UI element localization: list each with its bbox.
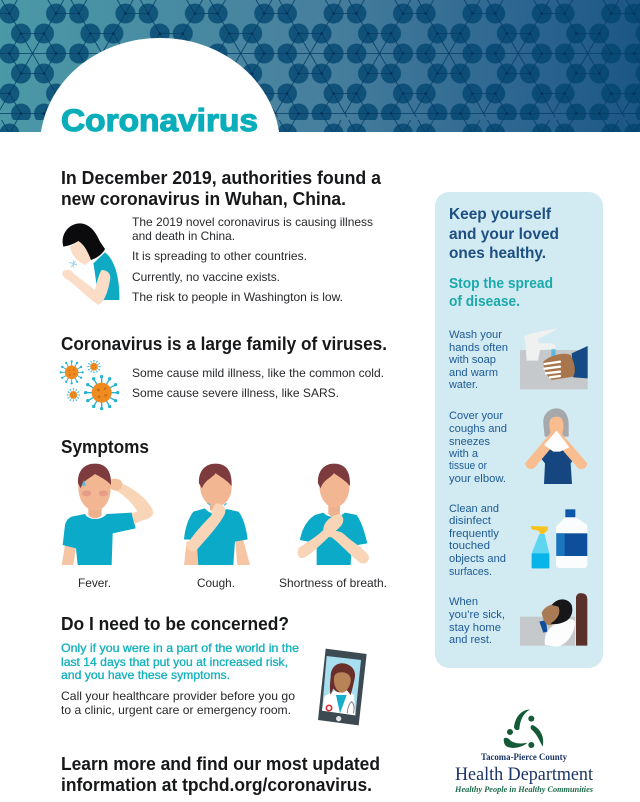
teal paragraph	[61, 641, 299, 682]
panel heading: ones healthy.	[449, 245, 546, 262]
tip: clean surfaces	[449, 503, 506, 578]
tip: stay home	[449, 596, 505, 646]
teal paragraph: and you have these symptoms.	[61, 668, 230, 682]
logo: Health Department	[454, 709, 594, 794]
text block: situation: The risk to people in Washington is low.	[132, 290, 343, 304]
panel subheading: Stop the spread	[449, 276, 553, 292]
text block: situation: It is spreading to other countries.	[132, 249, 307, 263]
icon: viruses	[60, 360, 119, 410]
panel subheading: of disease.	[449, 294, 520, 310]
tip: wash hands: and warm	[449, 367, 498, 379]
footer call to action	[61, 754, 380, 795]
tip: wash hands: hands often	[449, 342, 508, 354]
icon: washing hands	[520, 328, 588, 389]
call paragraph: Call your healthcare provider before you go	[61, 689, 295, 703]
header banner	[0, 0, 640, 132]
icon: cleaning bottles	[531, 509, 587, 568]
text block: situation: and death in China.	[132, 229, 235, 243]
white arch	[41, 38, 279, 132]
panel heading: Keep yourself	[449, 206, 552, 223]
tip: cover coughs	[448, 410, 507, 485]
logo: Health Department: Healthy People in Healthy Communities	[454, 784, 594, 794]
call paragraph: to a clinic, urgent care or emergency room.	[61, 703, 291, 717]
panel subheading	[449, 276, 553, 310]
panel: keep healthy	[435, 192, 603, 668]
tip: wash hands: with soap	[448, 354, 496, 366]
text block: situation: The 2019 novel coronavirus is causing illness	[132, 215, 373, 229]
symptom labels: Fever.	[78, 576, 111, 590]
tip: stay home: When	[449, 596, 478, 608]
panel heading	[449, 206, 559, 262]
teal paragraph: Only if you were in a part of the world in the	[61, 641, 299, 655]
tip: cover coughs: with a	[448, 448, 479, 460]
title: Coronavirus	[61, 102, 258, 138]
tip: wash hands	[448, 329, 508, 391]
tip: clean surfaces: touched	[449, 540, 490, 552]
tip: clean surfaces: Clean and	[449, 503, 499, 515]
text block: illness types: Some cause mild illness, like the common cold.	[132, 366, 384, 380]
heading: December 2019: new coronavirus in Wuhan, China.	[61, 189, 346, 209]
tip: clean surfaces: surfaces.	[449, 566, 492, 578]
text block: illness types: Some cause severe illness, like SARS.	[132, 386, 339, 400]
footer call to action: Learn more and find our most updated	[61, 754, 380, 774]
figure: cough	[184, 464, 250, 565]
footer call to action: information at tpchd.org/coronavirus.	[61, 775, 372, 795]
tip: stay home: you’re sick,	[449, 609, 505, 621]
panel heading: and your loved	[449, 226, 559, 243]
tip: cover coughs: your elbow.	[449, 473, 506, 485]
tip: clean surfaces: disinfect	[449, 515, 492, 527]
call paragraph	[61, 689, 295, 717]
symptom labels: Shortness of breath.	[279, 576, 387, 590]
tip: wash hands: Wash your	[449, 329, 502, 341]
icon: person sneezing into tissue	[525, 408, 587, 484]
heading: symptoms: Symptoms	[61, 437, 149, 457]
heading: family of viruses: Coronavirus is a large family of viruses.	[61, 334, 387, 354]
symptom labels: Cough.	[197, 576, 235, 590]
heading: December 2019: In December 2019, authorities found a	[61, 168, 382, 188]
tip: cover coughs: tissue or	[449, 460, 487, 472]
text block: situation: Currently, no vaccine exists.	[132, 270, 280, 284]
text block: situation	[132, 215, 373, 304]
icon: person resting in bed	[520, 593, 587, 647]
tip: stay home: and rest.	[449, 634, 492, 646]
icon: coughing woman	[62, 223, 119, 305]
tip: wash hands: water.	[448, 379, 478, 391]
symptom labels	[78, 576, 387, 590]
figure: shortness of breath	[298, 464, 369, 565]
tip: cover coughs: coughs and	[449, 423, 507, 435]
logo mark	[504, 709, 543, 748]
teal paragraph: last 14 days that put you at increased risk,	[61, 655, 288, 669]
heading: concerned: Do I need to be concerned?	[61, 614, 289, 634]
heading: December 2019	[61, 168, 382, 209]
logo: Health Department: Health Department	[455, 764, 594, 785]
tip: cover coughs: sneezes	[449, 436, 490, 448]
figure: fever	[62, 464, 153, 565]
tip: clean surfaces: frequently	[449, 528, 499, 540]
text block: illness types	[132, 366, 384, 400]
icon: phone with doctor	[318, 649, 367, 725]
tip: stay home: stay home	[449, 622, 501, 634]
logo text: Tacoma-Pierce County	[481, 753, 567, 763]
tip: clean surfaces: objects and	[449, 553, 506, 565]
tip: cover coughs: Cover your	[449, 410, 503, 422]
